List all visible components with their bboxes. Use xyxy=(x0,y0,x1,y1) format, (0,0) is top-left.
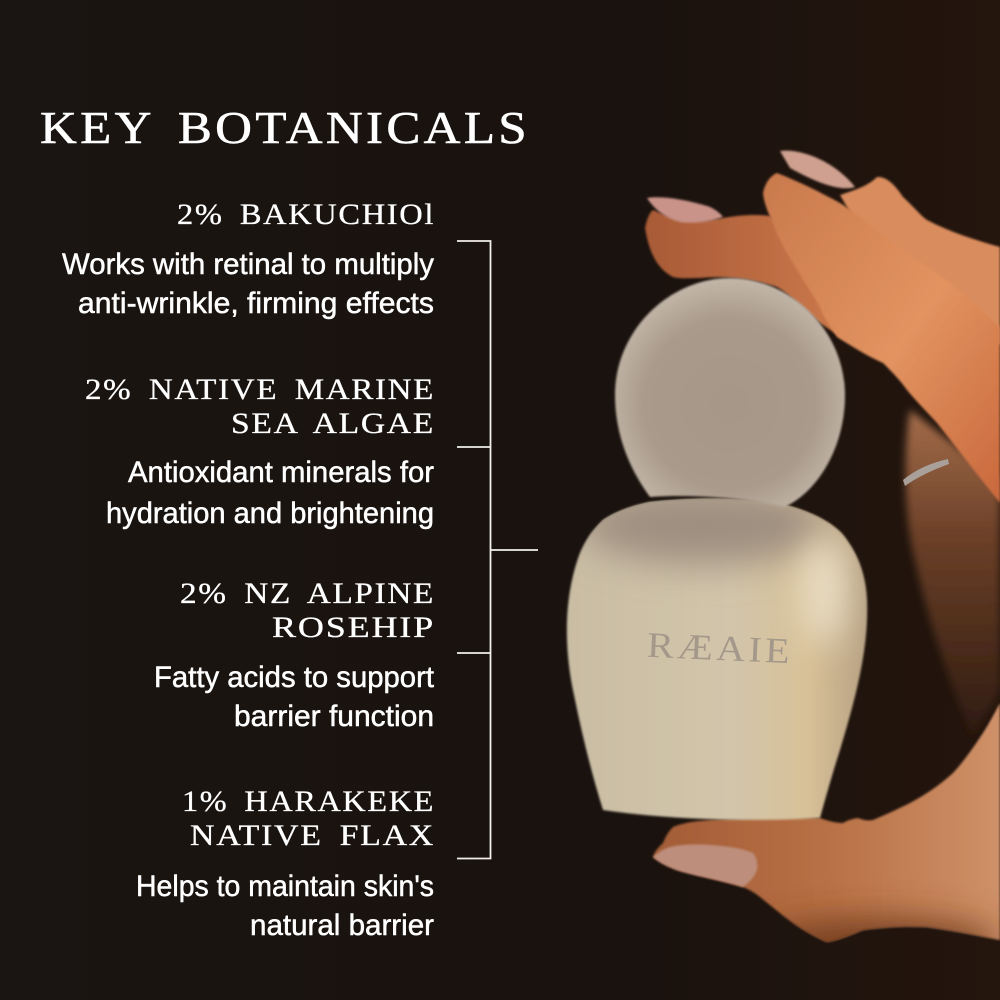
ring xyxy=(903,459,949,486)
ingredient: rosehip xyxy=(154,577,435,733)
ingredient: bakuchiol: anti-wrinkle, firming effects xyxy=(78,287,434,320)
right highlight xyxy=(807,535,843,645)
ingredient: bakuchiol xyxy=(62,198,435,320)
sphere cap xyxy=(615,278,845,507)
back finger xyxy=(840,177,1000,345)
title: KEY BOTANICALS xyxy=(40,102,530,153)
index fingernail xyxy=(647,197,723,223)
engraved logo: RÆAIE xyxy=(646,625,794,671)
ingredient: native flax: NATIVE FLAX xyxy=(190,819,435,852)
ingredient: sea algae: 2% NATIVE MARINE xyxy=(85,373,435,406)
main finger xyxy=(763,173,1000,503)
back fingernail xyxy=(780,151,855,188)
ingredient: rosehip: 2% NZ ALPINE xyxy=(180,577,435,610)
ingredient: bakuchiol: Works with retinal to multiply xyxy=(62,248,434,281)
ingredient: sea algae xyxy=(85,373,435,530)
bracket connector xyxy=(457,241,538,858)
ingredient: rosehip: Fatty acids to support xyxy=(154,661,435,694)
thumb lower shadow xyxy=(782,899,1000,942)
ingredient: native flax: 1% HARAKEKE xyxy=(182,785,435,818)
ingredient: native flax: Helps to maintain skin's xyxy=(136,870,434,903)
ingredient: sea algae: hydration and brightening xyxy=(106,497,434,530)
ingredient: bakuchiol: 2% BAKUCHIOl xyxy=(177,198,435,231)
ingredient: native flax: natural barrier xyxy=(250,909,434,942)
thumb xyxy=(653,703,1000,942)
index finger xyxy=(645,210,845,340)
ingredient: native flax xyxy=(136,785,435,942)
ingredient: sea algae: Antioxidant minerals for xyxy=(128,456,434,489)
ingredient: sea algae: SEA ALGAE xyxy=(231,407,435,440)
bottle shading xyxy=(580,485,843,645)
palm behind bottle xyxy=(906,410,1000,735)
ingredient: rosehip: ROSEHIP xyxy=(272,611,435,644)
bottle xyxy=(567,278,867,820)
hand holding bottle xyxy=(645,151,1000,969)
thumb shading xyxy=(782,899,1000,942)
shadow below cap xyxy=(580,485,830,565)
thumbnail xyxy=(653,844,757,887)
bottle base xyxy=(567,499,867,820)
ingredient: rosehip: barrier function xyxy=(234,700,434,733)
